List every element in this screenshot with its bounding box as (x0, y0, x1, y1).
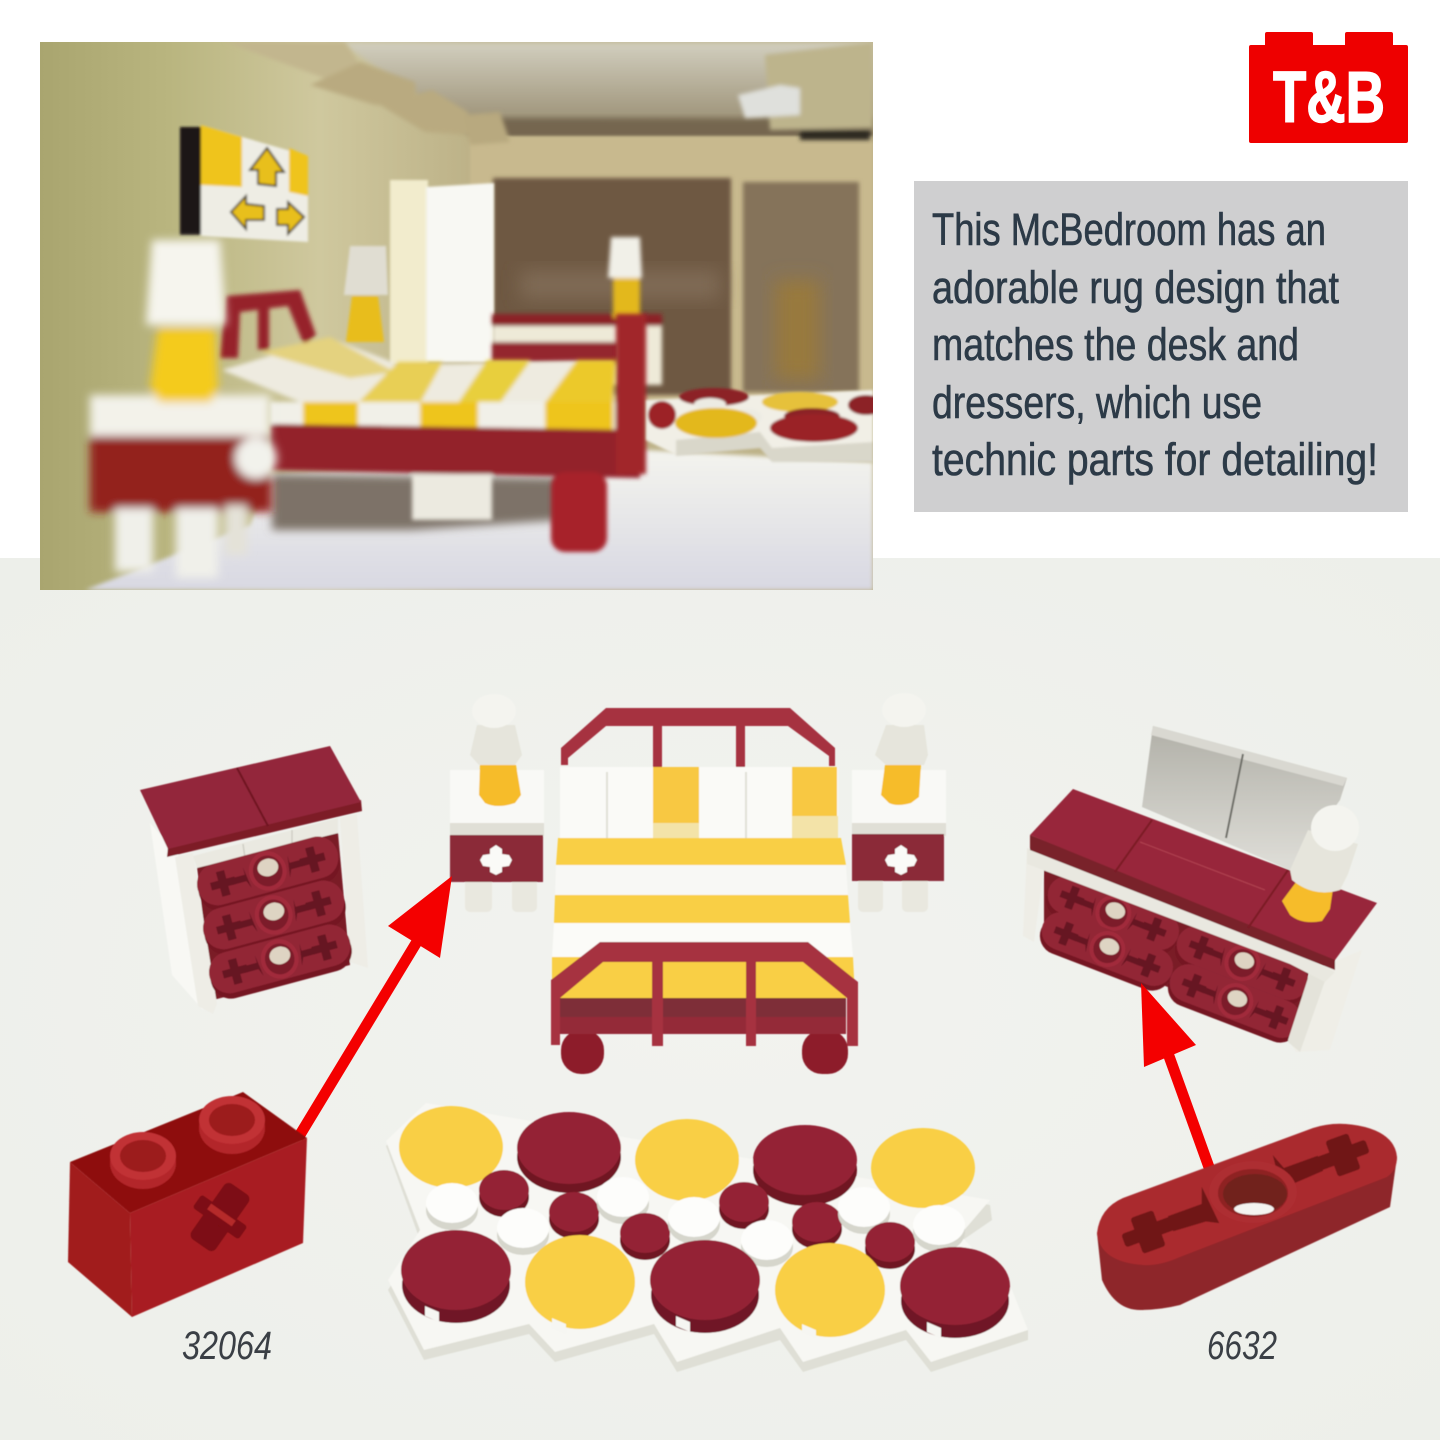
photo: rug (646, 388, 884, 462)
nightstand and lamp (right) (852, 693, 946, 912)
icon: lift arm drawers (192, 832, 357, 1003)
callout: description: This McBedroom has an (932, 204, 1326, 255)
label: part number 6632: 6632 (1207, 1324, 1277, 1368)
logo: T&B brick: T&B (1273, 58, 1385, 138)
desk lamp (1282, 870, 1335, 922)
photo: foreground nightstand and lamp (90, 240, 277, 578)
icon: technic lift arm 6632 (1097, 1124, 1397, 1310)
icon: technic brick 32064 (68, 1092, 307, 1317)
dresser (left) (140, 746, 368, 1014)
photo: lamp on back nightstand (344, 246, 388, 342)
pillows (560, 767, 838, 838)
headboard (561, 708, 835, 766)
photo: bedroom interior (40, 42, 884, 590)
background panel (0, 558, 1440, 1440)
footboard (551, 942, 858, 1046)
rug tiles (386, 1108, 1028, 1372)
rug bottom row big studs (401, 1230, 1010, 1338)
under-bed shadow (272, 474, 560, 530)
callout: description (914, 181, 1408, 512)
rug top row big studs (399, 1106, 975, 1208)
callout: description: dressers, which use (932, 377, 1262, 428)
callout: description: technic parts for detailing! (932, 434, 1378, 485)
photo: back dresser and far lamp (492, 237, 662, 385)
desk with mirror (1023, 726, 1377, 1052)
callout: description: matches the desk and (932, 319, 1299, 370)
icon: wall sign with arrows (180, 125, 308, 242)
arrow: brick to nightstand (298, 876, 452, 1138)
icon: lift arm drawers (1034, 871, 1314, 1048)
stripes (556, 838, 846, 865)
nightstand and lamp (left) (450, 694, 544, 912)
callout: description: adorable rug design that (932, 262, 1339, 313)
label: part number 32064: 32064 (182, 1324, 272, 1368)
rug small studs (426, 1170, 965, 1269)
arrow: lift arm to desk (1141, 983, 1210, 1170)
logo: T&B brick (1249, 32, 1408, 143)
rug (386, 1103, 1028, 1372)
bed frame (561, 1030, 604, 1074)
photo: bed (220, 290, 646, 552)
bed (551, 708, 858, 1074)
